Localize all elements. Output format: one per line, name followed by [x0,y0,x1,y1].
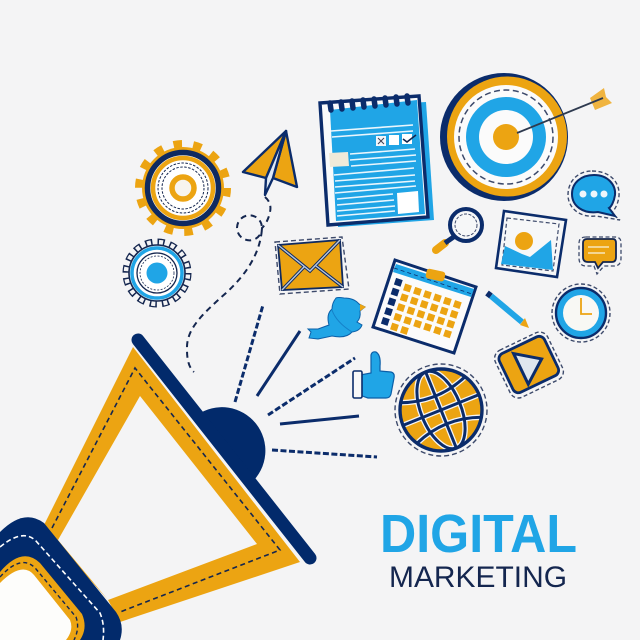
megaphone [0,340,310,640]
megaphone back dome [197,407,265,483]
icon: calendar [373,260,476,353]
icon: large gear [139,144,227,232]
icon: pencil [487,293,529,328]
icon: notebook [320,96,434,227]
sound rays [235,305,377,457]
megaphone front rim [138,340,310,558]
icon: thumbs up [353,352,394,398]
notebook text lines [331,125,416,216]
icon: speech bubble [568,171,620,220]
icon: paper plane [243,131,297,195]
icon: target with arrow [440,73,612,201]
icon: bird [308,298,366,339]
icon: small gear [126,242,188,304]
icon: magnifier [436,209,482,250]
icon: globe [388,357,494,463]
dashed flight path [187,197,270,372]
icon: photo frame [496,211,566,277]
icon: envelope [275,237,349,294]
icon: clock [552,284,610,342]
megaphone handle [0,517,122,640]
notebook spiral rings [330,96,408,110]
arrow [517,88,612,133]
megaphone cone [43,347,300,622]
title: marketing: MARKETING [389,561,567,594]
calendar day grid [380,278,463,348]
icon: message bubble [579,237,621,274]
title: digital: DIGITAL [380,504,577,564]
cone stitching [52,368,280,612]
icon: video player [492,329,566,401]
